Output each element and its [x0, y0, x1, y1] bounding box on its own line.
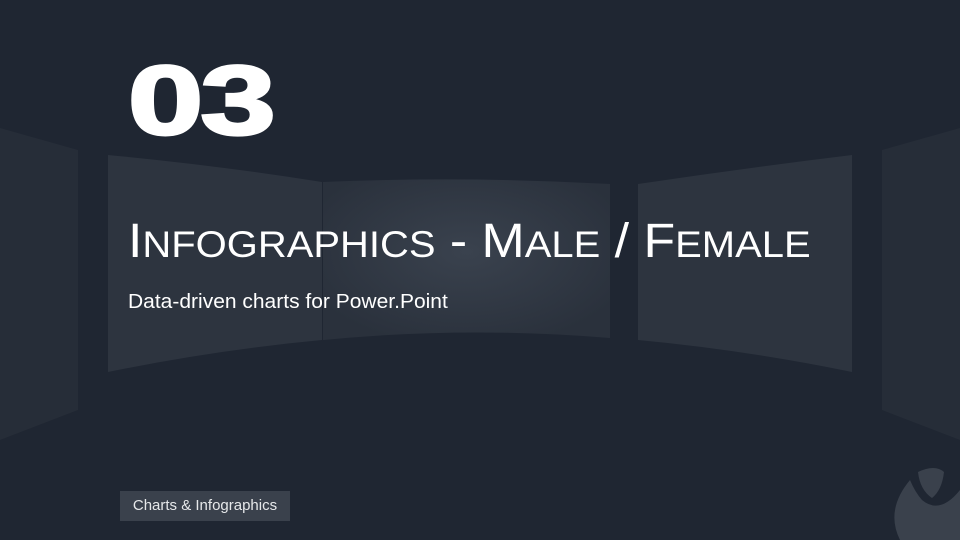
section number: 03 — [128, 45, 273, 155]
subtitle: Data-driven charts for Power.Point — [128, 291, 448, 313]
title: INFOGRAPHICS - MALE / FEMALE — [128, 215, 811, 268]
footer tag — [120, 491, 290, 521]
logo — [894, 468, 960, 540]
footer tag: Charts & Infographics — [133, 497, 277, 514]
